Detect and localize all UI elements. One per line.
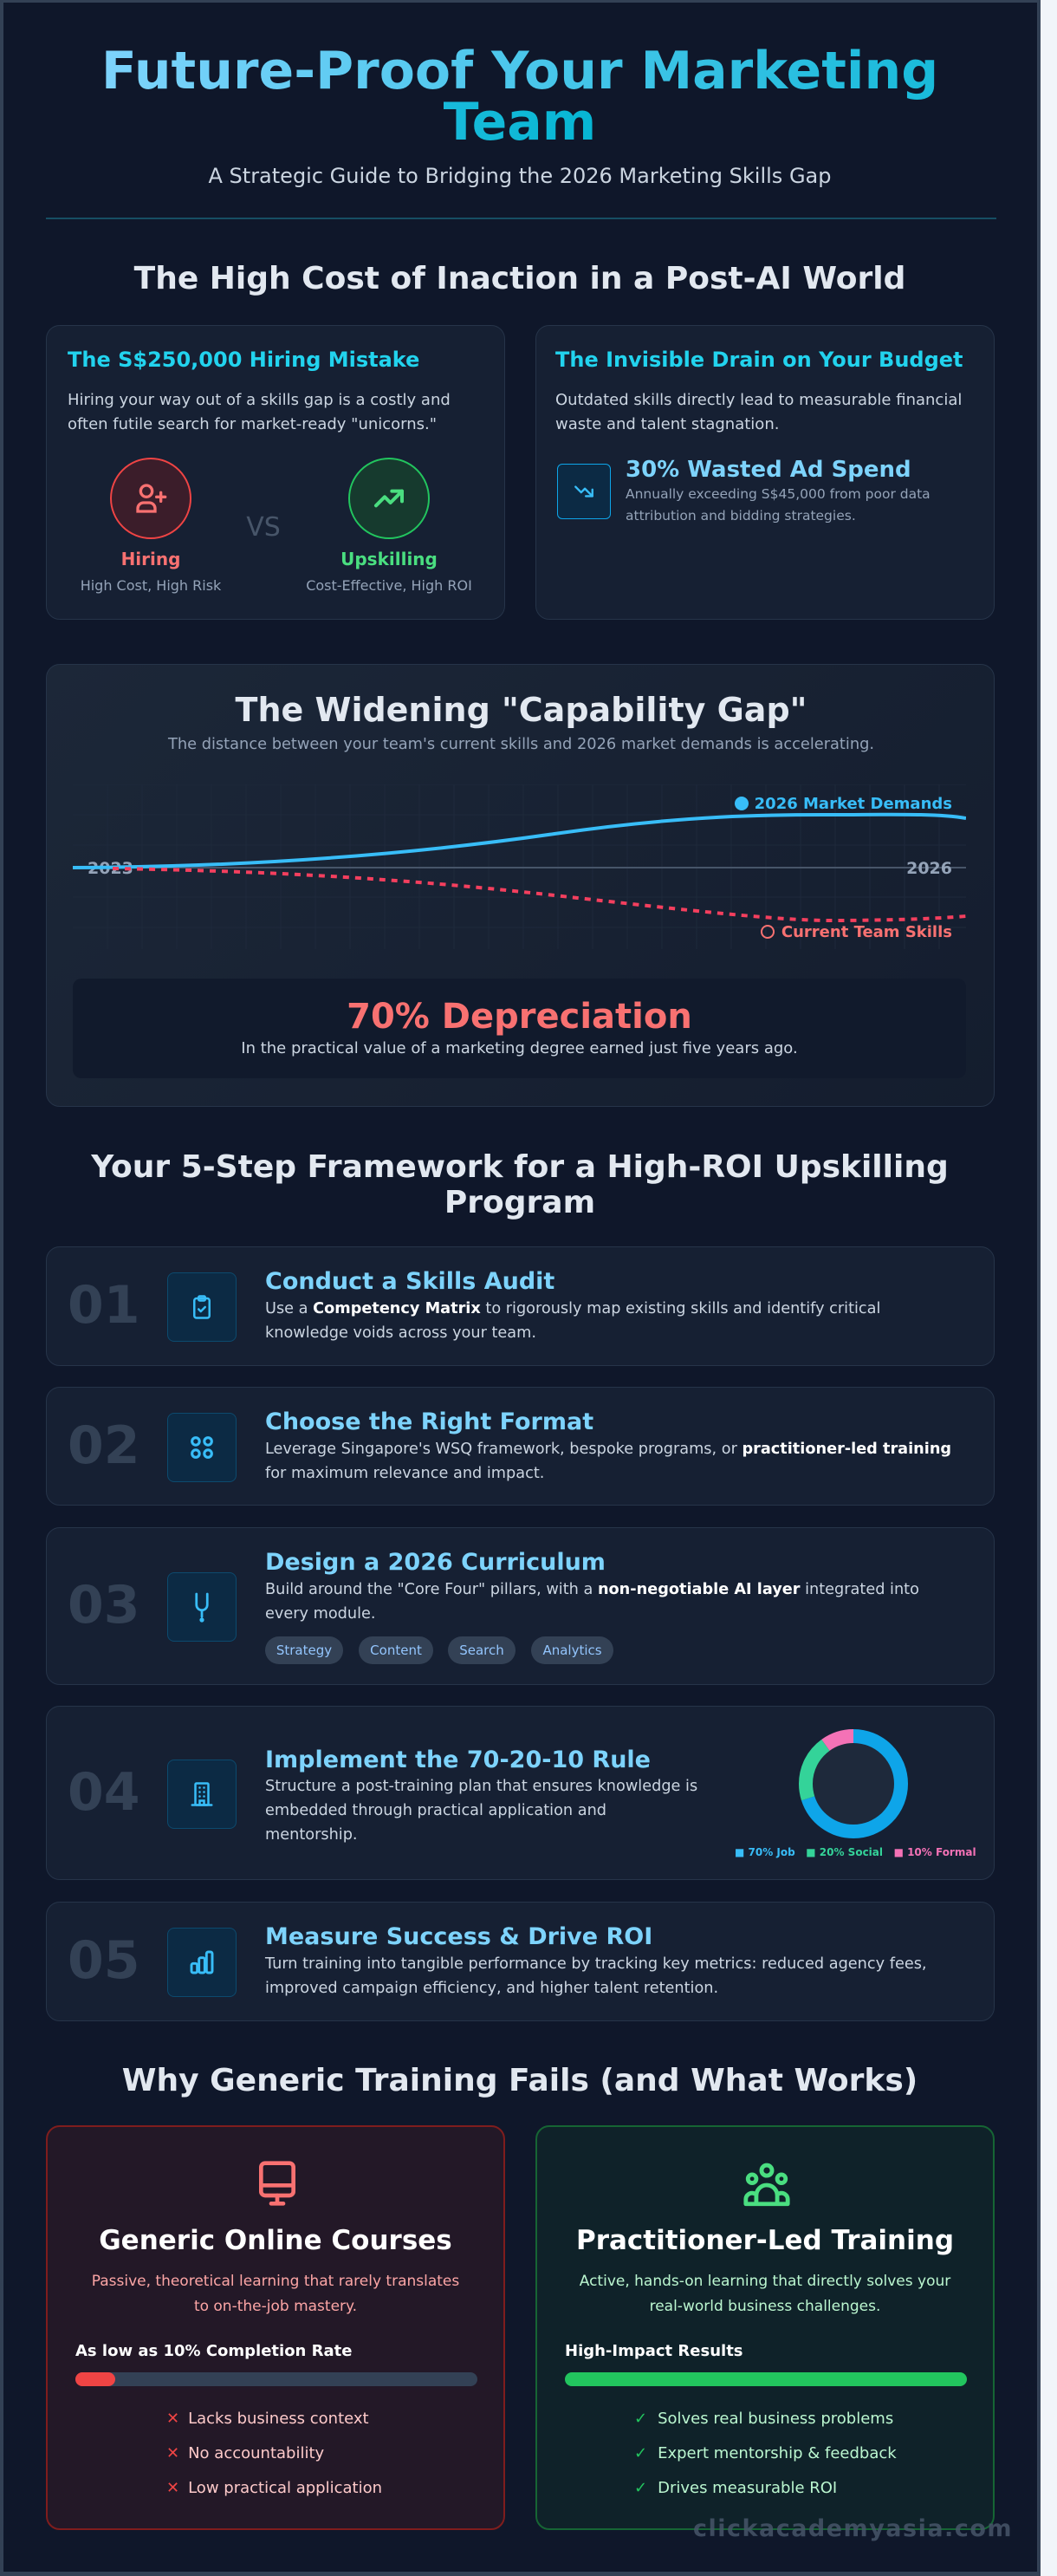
number: 04 (68, 1762, 140, 1823)
icon: group (743, 2163, 790, 2207)
step text (265, 1778, 697, 1844)
legend: market demands: 2026 Market Demands (755, 795, 952, 813)
step text: Use a Competency Matrix to rigorously map existing skills and identify critical (265, 1300, 880, 1317)
card text (92, 2273, 459, 2315)
heading: high cost of inaction: The High Cost of Inaction in a Post-AI World (134, 261, 905, 296)
list: drawbacks: ✕ Low practical application (166, 2479, 382, 2497)
label: upskilling: Upskilling (340, 549, 438, 569)
step text (265, 1441, 951, 1482)
number: 02 (68, 1415, 140, 1476)
panel: generic online courses (46, 2125, 505, 2530)
callout: 70% depreciation: In the practical value of a marketing degree earned just five years ago. (241, 1039, 798, 1057)
results label: High-Impact Results (565, 2342, 743, 2360)
tags (265, 1636, 613, 1664)
step text: Leverage Singapore's WSQ framework, bespoke programs, or practitioner-led training (265, 1441, 951, 1458)
line: current skills (113, 868, 966, 920)
step text (265, 1581, 919, 1623)
list: drawbacks: ✕ No accountability (166, 2444, 324, 2462)
label: hiring: Hiring (121, 549, 180, 569)
card text: Outdated skills directly lead to measurable financial (555, 391, 962, 409)
card text (555, 391, 962, 433)
vs: VS (246, 512, 281, 543)
list: benefits: ✓ Expert mentorship & feedback (634, 2444, 897, 2462)
number: 03 (68, 1575, 140, 1636)
step 02 (46, 1387, 995, 1506)
subtitle: A Strategic Guide to Bridging the 2026 Marketing Skills Gap (208, 164, 831, 188)
card text: to on-the-job mastery. (194, 2298, 357, 2315)
label: upskilling (306, 549, 472, 594)
card title: Generic Online Courses (99, 2225, 452, 2256)
icon: pen tool (167, 1572, 237, 1642)
icon: monitor (259, 2161, 295, 2206)
stat: wasted ad spend (626, 457, 931, 524)
progress bar (75, 2372, 477, 2386)
step text (265, 1300, 880, 1342)
card text (68, 391, 451, 433)
icon: trend down (557, 464, 611, 519)
axis label 2023: 2023 (88, 859, 133, 878)
step title: Design a 2026 Curriculum (265, 1549, 606, 1576)
tags: Strategy (276, 1643, 332, 1658)
card text: often futile search for market-ready "unicorns." (68, 415, 437, 433)
card text: Hiring your way out of a skills gap is a costly and (68, 391, 451, 409)
donut chart (799, 1729, 908, 1838)
number: 01 (68, 1275, 140, 1336)
tags: Search (459, 1643, 504, 1658)
card text: real-world business challenges. (650, 2298, 880, 2315)
number: 05 (68, 1930, 140, 1991)
step title: Measure Success & Drive ROI (265, 1923, 652, 1950)
step text: mentorship. (265, 1826, 358, 1844)
card title: The S$250,000 Hiring Mistake (68, 348, 419, 372)
axis label 2026: 2026 (906, 859, 952, 878)
stat: wasted ad spend: Annually exceeding S$45,000 from poor data (626, 486, 931, 502)
list: drawbacks (166, 2410, 382, 2497)
donut legend: ■ 70% Job ■ 20% Social ■ 10% Formal (735, 1846, 976, 1858)
icon: bar chart (167, 1928, 237, 1997)
icon: grid (167, 1413, 237, 1482)
heading: framework: Your 5-Step Framework for a High-ROI Upskilling (91, 1149, 949, 1185)
stat: wasted ad spend: 30% Wasted Ad Spend (626, 457, 911, 483)
step title: Conduct a Skills Audit (265, 1268, 554, 1295)
step text (265, 1955, 927, 1997)
completion label: As low as 10% Completion Rate (75, 2342, 352, 2360)
card text: Active, hands-on learning that directly solves your (580, 2273, 950, 2290)
line: market demands (73, 815, 966, 868)
step title: Choose the Right Format (265, 1408, 593, 1435)
tags: Analytics (542, 1643, 602, 1658)
heading: framework: Program (444, 1185, 595, 1220)
title: Team (444, 92, 596, 153)
list: drawbacks: ✕ Lacks business context (166, 2410, 369, 2428)
card text (579, 2273, 951, 2315)
callout: 70% depreciation (73, 979, 966, 1078)
label: hiring (81, 549, 222, 594)
heading: why generic training fails: Why Generic Training Fails (and What Works) (122, 2063, 918, 2098)
panel: hiring mistake (46, 325, 505, 620)
icon: clipboard (167, 1272, 237, 1342)
watermark: clickacademyasia.com (693, 2515, 1013, 2542)
label: hiring: High Cost, High Risk (81, 577, 221, 594)
title (101, 41, 938, 153)
list: benefits: ✓ Solves real business problems (634, 2410, 893, 2428)
step text: Turn training into tangible performance by tracking key metrics: reduced agency fees, (265, 1955, 927, 1973)
panel: invisible drain (535, 325, 995, 620)
icon: building (167, 1760, 237, 1829)
title: Future-Proof Your Marketing (101, 41, 938, 101)
icon: upskilling (348, 458, 430, 539)
legend: current skills: Current Team Skills (781, 923, 952, 941)
list: benefits: ✓ Drives measurable ROI (634, 2479, 837, 2497)
step 05 (46, 1902, 995, 2021)
callout: 70% depreciation: 70% Depreciation (347, 997, 692, 1037)
step text: every module. (265, 1605, 376, 1623)
gap subtitle: The distance between your team's current skills and 2026 market demands is accelerating. (168, 735, 874, 753)
step text: knowledge voids across your team. (265, 1324, 536, 1342)
heading: framework (90, 1149, 949, 1220)
step text: improved campaign efficiency, and higher talent retention. (265, 1980, 718, 1997)
step 01 (46, 1246, 995, 1366)
card text: waste and talent stagnation. (555, 415, 779, 433)
line chart (73, 784, 966, 949)
step 03 (46, 1527, 995, 1685)
step title: Implement the 70-20-10 Rule (265, 1747, 651, 1773)
step 04 (46, 1706, 995, 1880)
step text: embedded through practical application and (265, 1802, 606, 1819)
tags: Content (370, 1643, 422, 1658)
icon: hiring (110, 458, 191, 539)
step text: for maximum relevance and impact. (265, 1465, 544, 1482)
panel: practitioner-led training (535, 2125, 995, 2530)
card title: The Invisible Drain on Your Budget (555, 348, 963, 372)
stat: wasted ad spend: attribution and bidding strategies. (626, 508, 856, 524)
gap title: The Widening "Capability Gap" (236, 691, 807, 729)
panel: capability gap (46, 664, 995, 1107)
label: upskilling: Cost-Effective, High ROI (306, 577, 472, 594)
card text: Passive, theoretical learning that rarely translates (92, 2273, 459, 2290)
step text: Structure a post-training plan that ensures knowledge is (265, 1778, 697, 1795)
step text: Build around the "Core Four" pillars, with a non-negotiable AI layer integrated into (265, 1581, 919, 1598)
card title: Practitioner-Led Training (576, 2225, 954, 2256)
list: benefits (634, 2410, 897, 2497)
progress bar (565, 2372, 967, 2386)
